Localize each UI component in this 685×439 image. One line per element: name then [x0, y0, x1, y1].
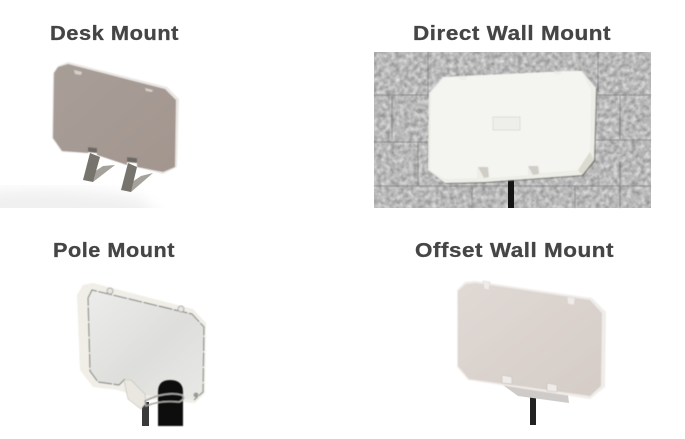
image: brick wall — [374, 52, 651, 208]
heading: desk mount: Desk Mount — [50, 22, 179, 45]
icon: offset bracket — [500, 383, 569, 403]
icon: desk mount feet — [83, 153, 153, 192]
icon: pole antenna panel — [77, 283, 206, 403]
panel: offset wall mount — [415, 239, 614, 425]
icon: wall antenna panel — [428, 71, 597, 184]
icon: offset cable — [530, 390, 536, 425]
panel: desk mount — [0, 24, 180, 208]
panel: direct wall mount — [374, 22, 651, 208]
icon: desk antenna panel — [52, 62, 179, 174]
heading: pole mount: Pole Mount — [53, 239, 175, 262]
icon: offset antenna panel — [457, 281, 606, 399]
heading: offset wall mount: Offset Wall Mount — [415, 239, 614, 262]
icon: black cable — [508, 178, 514, 208]
icon: pole and bracket — [124, 380, 183, 426]
panel: pole mount — [53, 239, 206, 426]
icon: desk shadow — [0, 190, 149, 208]
heading: direct wall mount: Direct Wall Mount — [413, 22, 611, 45]
icon: pole cable — [142, 402, 149, 426]
